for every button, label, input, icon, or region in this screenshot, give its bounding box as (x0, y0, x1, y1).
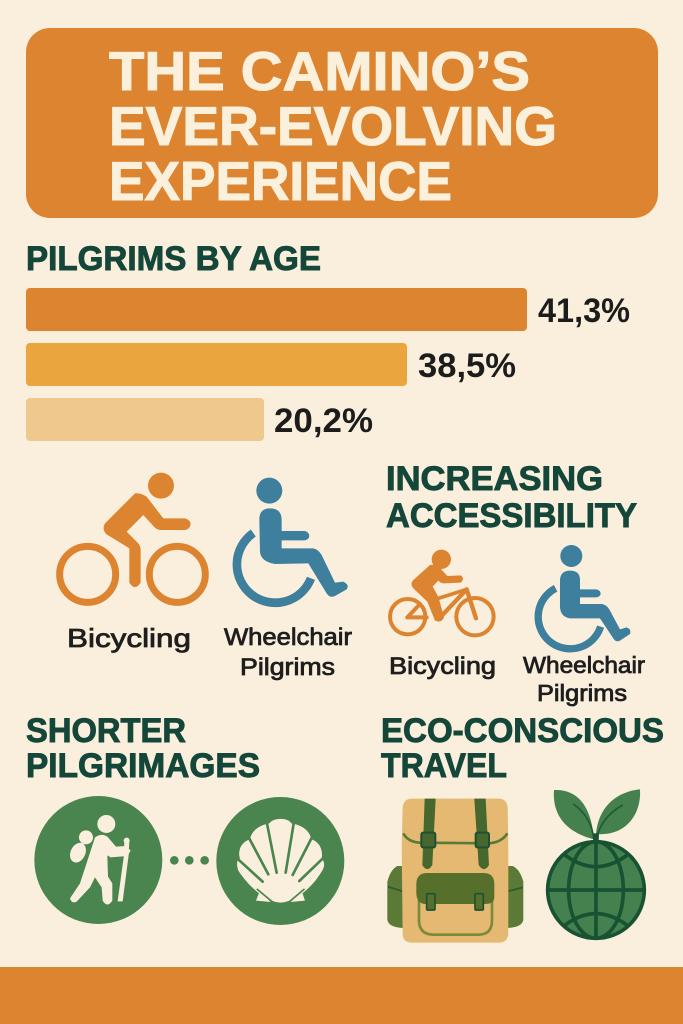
label: small bicycling: Bicycling (389, 653, 496, 680)
icon: small bicycling (390, 550, 494, 635)
icon: large bicycling (60, 473, 205, 602)
label: large wheelchair pilgrims: Pilgrims (240, 654, 335, 681)
bar chart: pilgrims by age (26, 288, 630, 441)
heading: eco-conscious travel (381, 712, 664, 785)
heading: increasing accessibility: INCREASING (386, 460, 603, 498)
heading: shorter pilgrimages (26, 712, 260, 785)
heading: pilgrims by age: PILGRIMS BY AGE (26, 240, 321, 278)
heading: increasing accessibility: ACCESSIBILITY (386, 497, 637, 535)
icon: hiker in green circle (34, 796, 162, 924)
heading: shorter pilgrimages: PILGRIMAGES (26, 747, 260, 785)
title banner: EVER-EVOLVING (109, 95, 557, 157)
label: large wheelchair pilgrims: Wheelchair (224, 624, 352, 651)
heading: increasing accessibility (386, 460, 637, 535)
heading: eco-conscious travel: ECO-CONSCIOUS (381, 712, 664, 750)
bar chart: pilgrims by age: 38,5% (418, 347, 516, 385)
icon: large wheelchair (237, 478, 348, 603)
label: large wheelchair pilgrims (224, 624, 352, 681)
icon: scallop shell in green circle (216, 797, 344, 925)
footer band (0, 967, 683, 1024)
title banner: THE CAMINO’S (109, 40, 530, 102)
icon: globe with leaves (548, 789, 644, 938)
label: large bicycling: Bicycling (67, 623, 191, 653)
icon: small wheelchair (538, 545, 630, 649)
title banner (26, 28, 658, 218)
label: small wheelchair pilgrims: Wheelchair (523, 652, 645, 678)
connector dots (170, 856, 209, 865)
icon: backpack (387, 799, 523, 943)
title banner: EXPERIENCE (109, 150, 452, 212)
label: small wheelchair pilgrims (523, 652, 645, 706)
bar chart: pilgrims by age: 20,2% (274, 402, 373, 440)
heading: eco-conscious travel: TRAVEL (381, 747, 507, 785)
bar chart: pilgrims by age: 41,3% (538, 292, 630, 330)
heading: shorter pilgrimages: SHORTER (26, 712, 186, 750)
label: small wheelchair pilgrims: Pilgrims (537, 680, 627, 706)
